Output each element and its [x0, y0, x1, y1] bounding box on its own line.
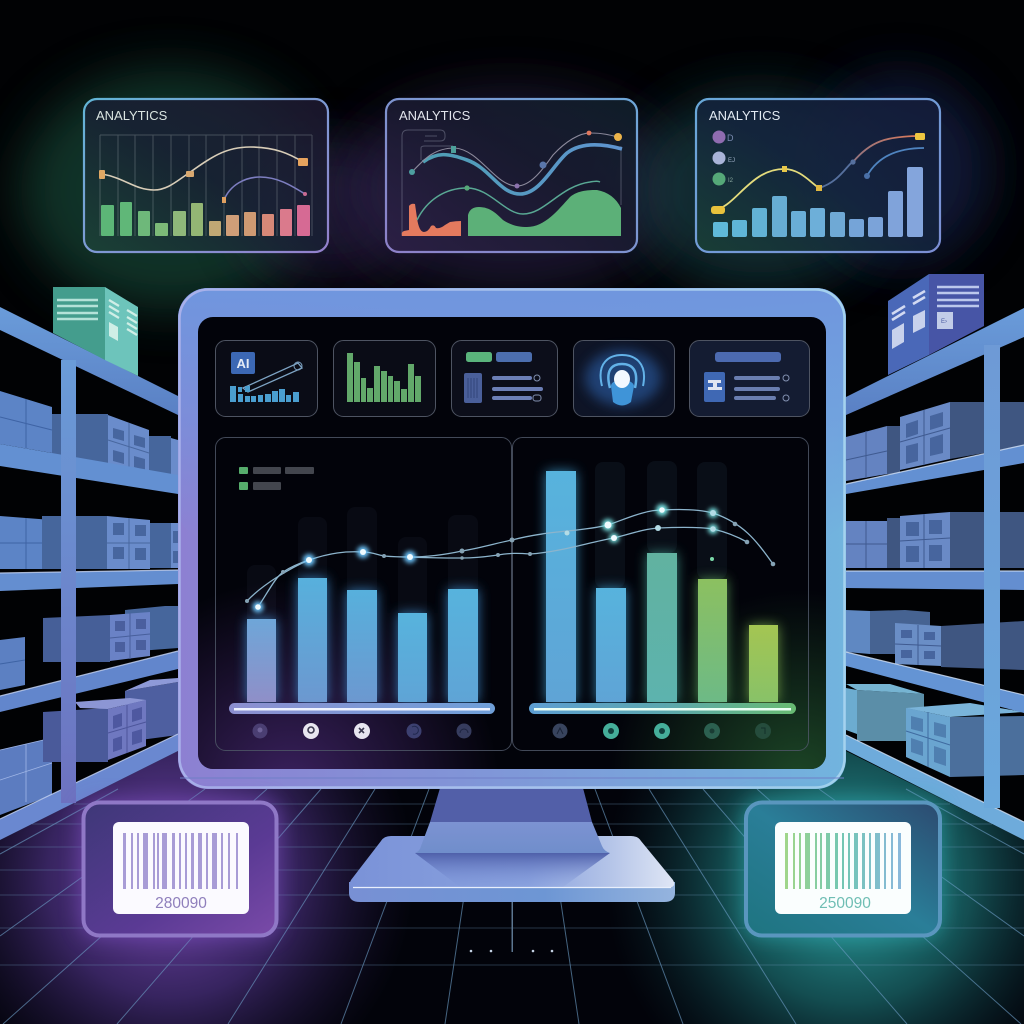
panel 1 grid: [100, 135, 312, 236]
right chart ghost bars: [595, 461, 727, 588]
tile: green bars: [334, 340, 436, 416]
panel 2 orange area: [402, 204, 461, 236]
tile: touch sensor: [574, 340, 674, 416]
right shelf boxes: [846, 402, 1024, 777]
analytics panel 3: [696, 99, 940, 252]
left shelf post: [61, 360, 76, 803]
left shelf boxes: [0, 391, 178, 815]
panel 3 bars: [713, 167, 923, 237]
panel 1 bars: [101, 202, 310, 236]
left chart legend: [239, 467, 314, 490]
analytics panel 2: [386, 99, 637, 252]
monitor frame: [178, 288, 846, 789]
panel 3 legend: D: [727, 133, 734, 143]
panel 3 heading: ANALYTICS: [709, 108, 781, 123]
tile: AI chart: [216, 340, 318, 416]
box on right shelf top: E›: [941, 319, 947, 325]
panel 3 lines: [711, 133, 925, 214]
left chart axis icons: [252, 723, 472, 739]
monitor: [178, 288, 846, 789]
left chart baseline rail: [229, 703, 495, 714]
monitor stand: [349, 788, 675, 902]
panel 1 lines: [99, 147, 308, 203]
right shelf post: [984, 345, 1000, 808]
panel 3 legend: EJ: [728, 158, 735, 164]
analytics panel 1: [84, 99, 328, 252]
left chart ghost bars: [247, 507, 478, 625]
panel 2 heading: ANALYTICS: [399, 108, 471, 123]
barcode card left: [80, 800, 279, 938]
left shelving unit: [0, 307, 178, 840]
barcode card right: [743, 800, 942, 938]
right shelf beams: [846, 308, 1024, 840]
left barcode number: 280090: [155, 895, 207, 912]
panel 3 legend: [712, 130, 735, 186]
right shelving unit: [846, 308, 1024, 840]
tile: list with pills: [452, 340, 558, 416]
box on right shelf top: [888, 274, 984, 375]
monitor screen: [198, 317, 826, 769]
left barcode bars: [123, 833, 238, 889]
right chart axis icons: [552, 723, 771, 739]
box on left shelf top: [53, 287, 138, 376]
panel 3 legend: I2: [728, 178, 734, 184]
tile: ID card list: [690, 340, 810, 416]
panel 2 outline frame: [402, 130, 621, 236]
stand neck: [415, 788, 610, 853]
trend lines with glowing points: [245, 504, 775, 612]
chart panel outlines: [216, 438, 808, 750]
floor with perspective grid: [0, 751, 1024, 1024]
right barcode number: 250090: [819, 895, 871, 912]
panel 1 heading: ANALYTICS: [96, 108, 168, 123]
right chart baseline rail: [529, 703, 796, 714]
right chart bars: [546, 471, 778, 702]
tile: AI chart: AI: [236, 356, 250, 371]
right barcode bars: [785, 833, 901, 889]
panel 2 green area: [468, 190, 621, 236]
panel 2 lines: [409, 131, 622, 220]
floor indicator dots: [470, 902, 553, 952]
stand base plate: [349, 836, 675, 902]
left shelf beams: [0, 307, 178, 840]
left chart bars: [247, 578, 478, 702]
